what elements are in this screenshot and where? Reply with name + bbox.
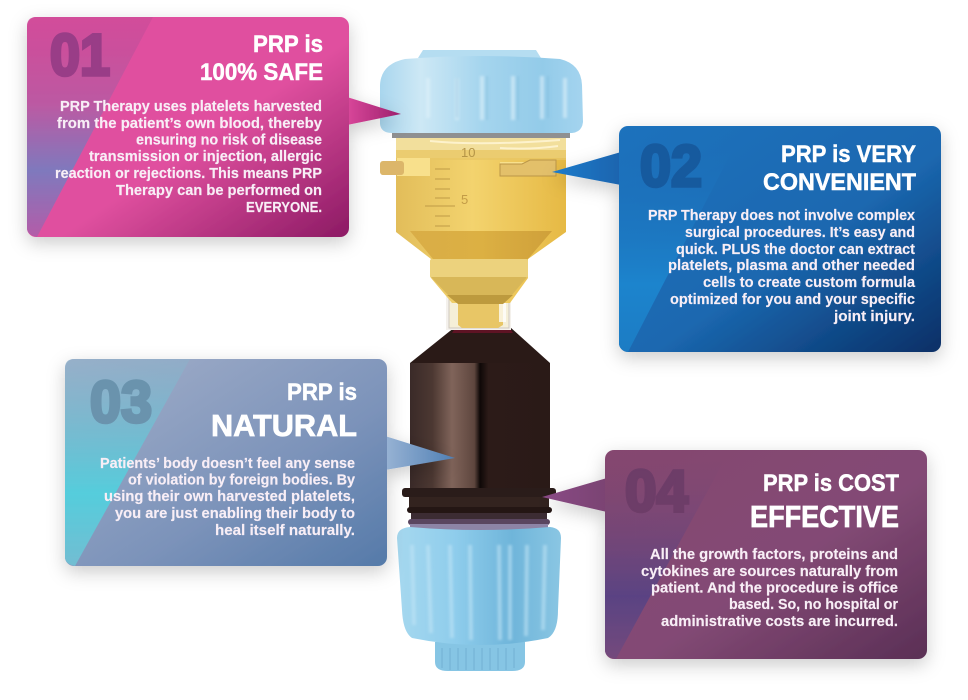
body text 01: transmission or injection, allergic bbox=[89, 149, 322, 165]
body text 02: quick. PLUS the doctor can extract bbox=[676, 242, 915, 258]
yellow container bbox=[396, 136, 566, 304]
number 02: 02 bbox=[640, 134, 702, 199]
panel 02 background bbox=[619, 126, 941, 352]
lower blue cap nub bbox=[435, 642, 525, 671]
panel 04: cost effective bbox=[542, 450, 927, 659]
panel 02: very convenient bbox=[552, 126, 941, 352]
lower blue cap bbox=[397, 527, 561, 645]
heading 04: EFFECTIVE bbox=[750, 500, 899, 534]
yellow container: 10 bbox=[461, 145, 475, 160]
body text 02: platelets, plasma and other needed bbox=[668, 258, 915, 274]
dark blood chamber bbox=[410, 327, 550, 492]
heading 01: PRP is bbox=[253, 31, 323, 58]
body text 04: based. So, no hospital or bbox=[729, 597, 898, 613]
heading 02: PRP is VERY bbox=[781, 141, 916, 168]
PRP tube device bbox=[380, 50, 583, 671]
body text 04: patient. And the procedure is office bbox=[651, 580, 898, 596]
body text 01: from the patient’s own blood, thereby bbox=[57, 116, 322, 132]
body text 04: cytokines are sources naturally from bbox=[641, 564, 898, 580]
body text 01 bbox=[55, 99, 322, 216]
body text 01: Therapy can be performed on bbox=[116, 183, 322, 199]
heading 01: 100% SAFE bbox=[200, 59, 323, 86]
body text 03: of violation by foreign bodies. By bbox=[128, 472, 355, 488]
body text 01: ensuring no risk of disease bbox=[136, 132, 322, 148]
heading 04 bbox=[750, 470, 899, 534]
threaded collar bbox=[402, 488, 556, 530]
panel 04 corner triangle bbox=[605, 450, 730, 659]
pointer 02 bbox=[552, 152, 621, 185]
body text 04 bbox=[641, 547, 898, 630]
pointer 03 bbox=[385, 436, 455, 470]
body text 02 bbox=[648, 208, 916, 325]
body text 03: using their own harvested platelets, bbox=[104, 489, 355, 505]
number 03: 03 bbox=[90, 370, 152, 435]
body text 04: All the growth factors, proteins and bbox=[650, 547, 898, 563]
body text 02: PRP Therapy does not involve complex bbox=[648, 208, 915, 224]
panel 03 background bbox=[65, 359, 387, 566]
body text 02: optimized for you and your specific bbox=[670, 292, 915, 308]
panel 04 background bbox=[605, 450, 927, 659]
heading 02: CONVENIENT bbox=[763, 169, 916, 196]
panel 02 corner triangle bbox=[619, 126, 745, 352]
panel 01 background bbox=[27, 17, 349, 237]
body text 01: reaction or rejections. This means PRP bbox=[55, 166, 322, 182]
pointer 04 bbox=[542, 478, 607, 512]
number 01: 01 bbox=[50, 23, 110, 88]
pointer 01 bbox=[347, 97, 401, 125]
glass neck bbox=[446, 290, 511, 330]
body text 01: PRP Therapy uses platelets harvested bbox=[60, 99, 322, 115]
panel 03 corner triangle bbox=[65, 359, 190, 566]
number 04: 04 bbox=[625, 459, 688, 524]
heading 04: PRP is COST bbox=[763, 470, 899, 497]
yellow container: 5 bbox=[461, 192, 468, 207]
heading 02 bbox=[763, 141, 916, 196]
body text 04: administrative costs are incurred. bbox=[661, 614, 898, 630]
heading 03: NATURAL bbox=[211, 409, 357, 443]
body text 03: Patients’ body doesn’t feel any sense bbox=[100, 456, 355, 472]
container side tabs bbox=[380, 160, 556, 176]
panel 01 corner triangle bbox=[27, 17, 153, 237]
panel 03: natural bbox=[65, 359, 455, 566]
body text 02: joint injury. bbox=[833, 309, 915, 325]
body text 03 bbox=[100, 456, 355, 539]
heading 03 bbox=[211, 379, 357, 443]
heading 03: PRP is bbox=[287, 379, 357, 406]
body text 02: cells to create custom formula bbox=[703, 275, 916, 291]
panel 01: 100% safe bbox=[27, 17, 401, 237]
top blue cap bbox=[380, 50, 583, 138]
body text 01: EVERYONE. bbox=[246, 200, 322, 216]
body text 02: surgical procedures. It’s easy and bbox=[685, 225, 915, 241]
body text 03: you are just enabling their body to bbox=[115, 506, 355, 522]
heading 01 bbox=[200, 31, 323, 86]
body text 03: heal itself naturally. bbox=[215, 523, 355, 539]
